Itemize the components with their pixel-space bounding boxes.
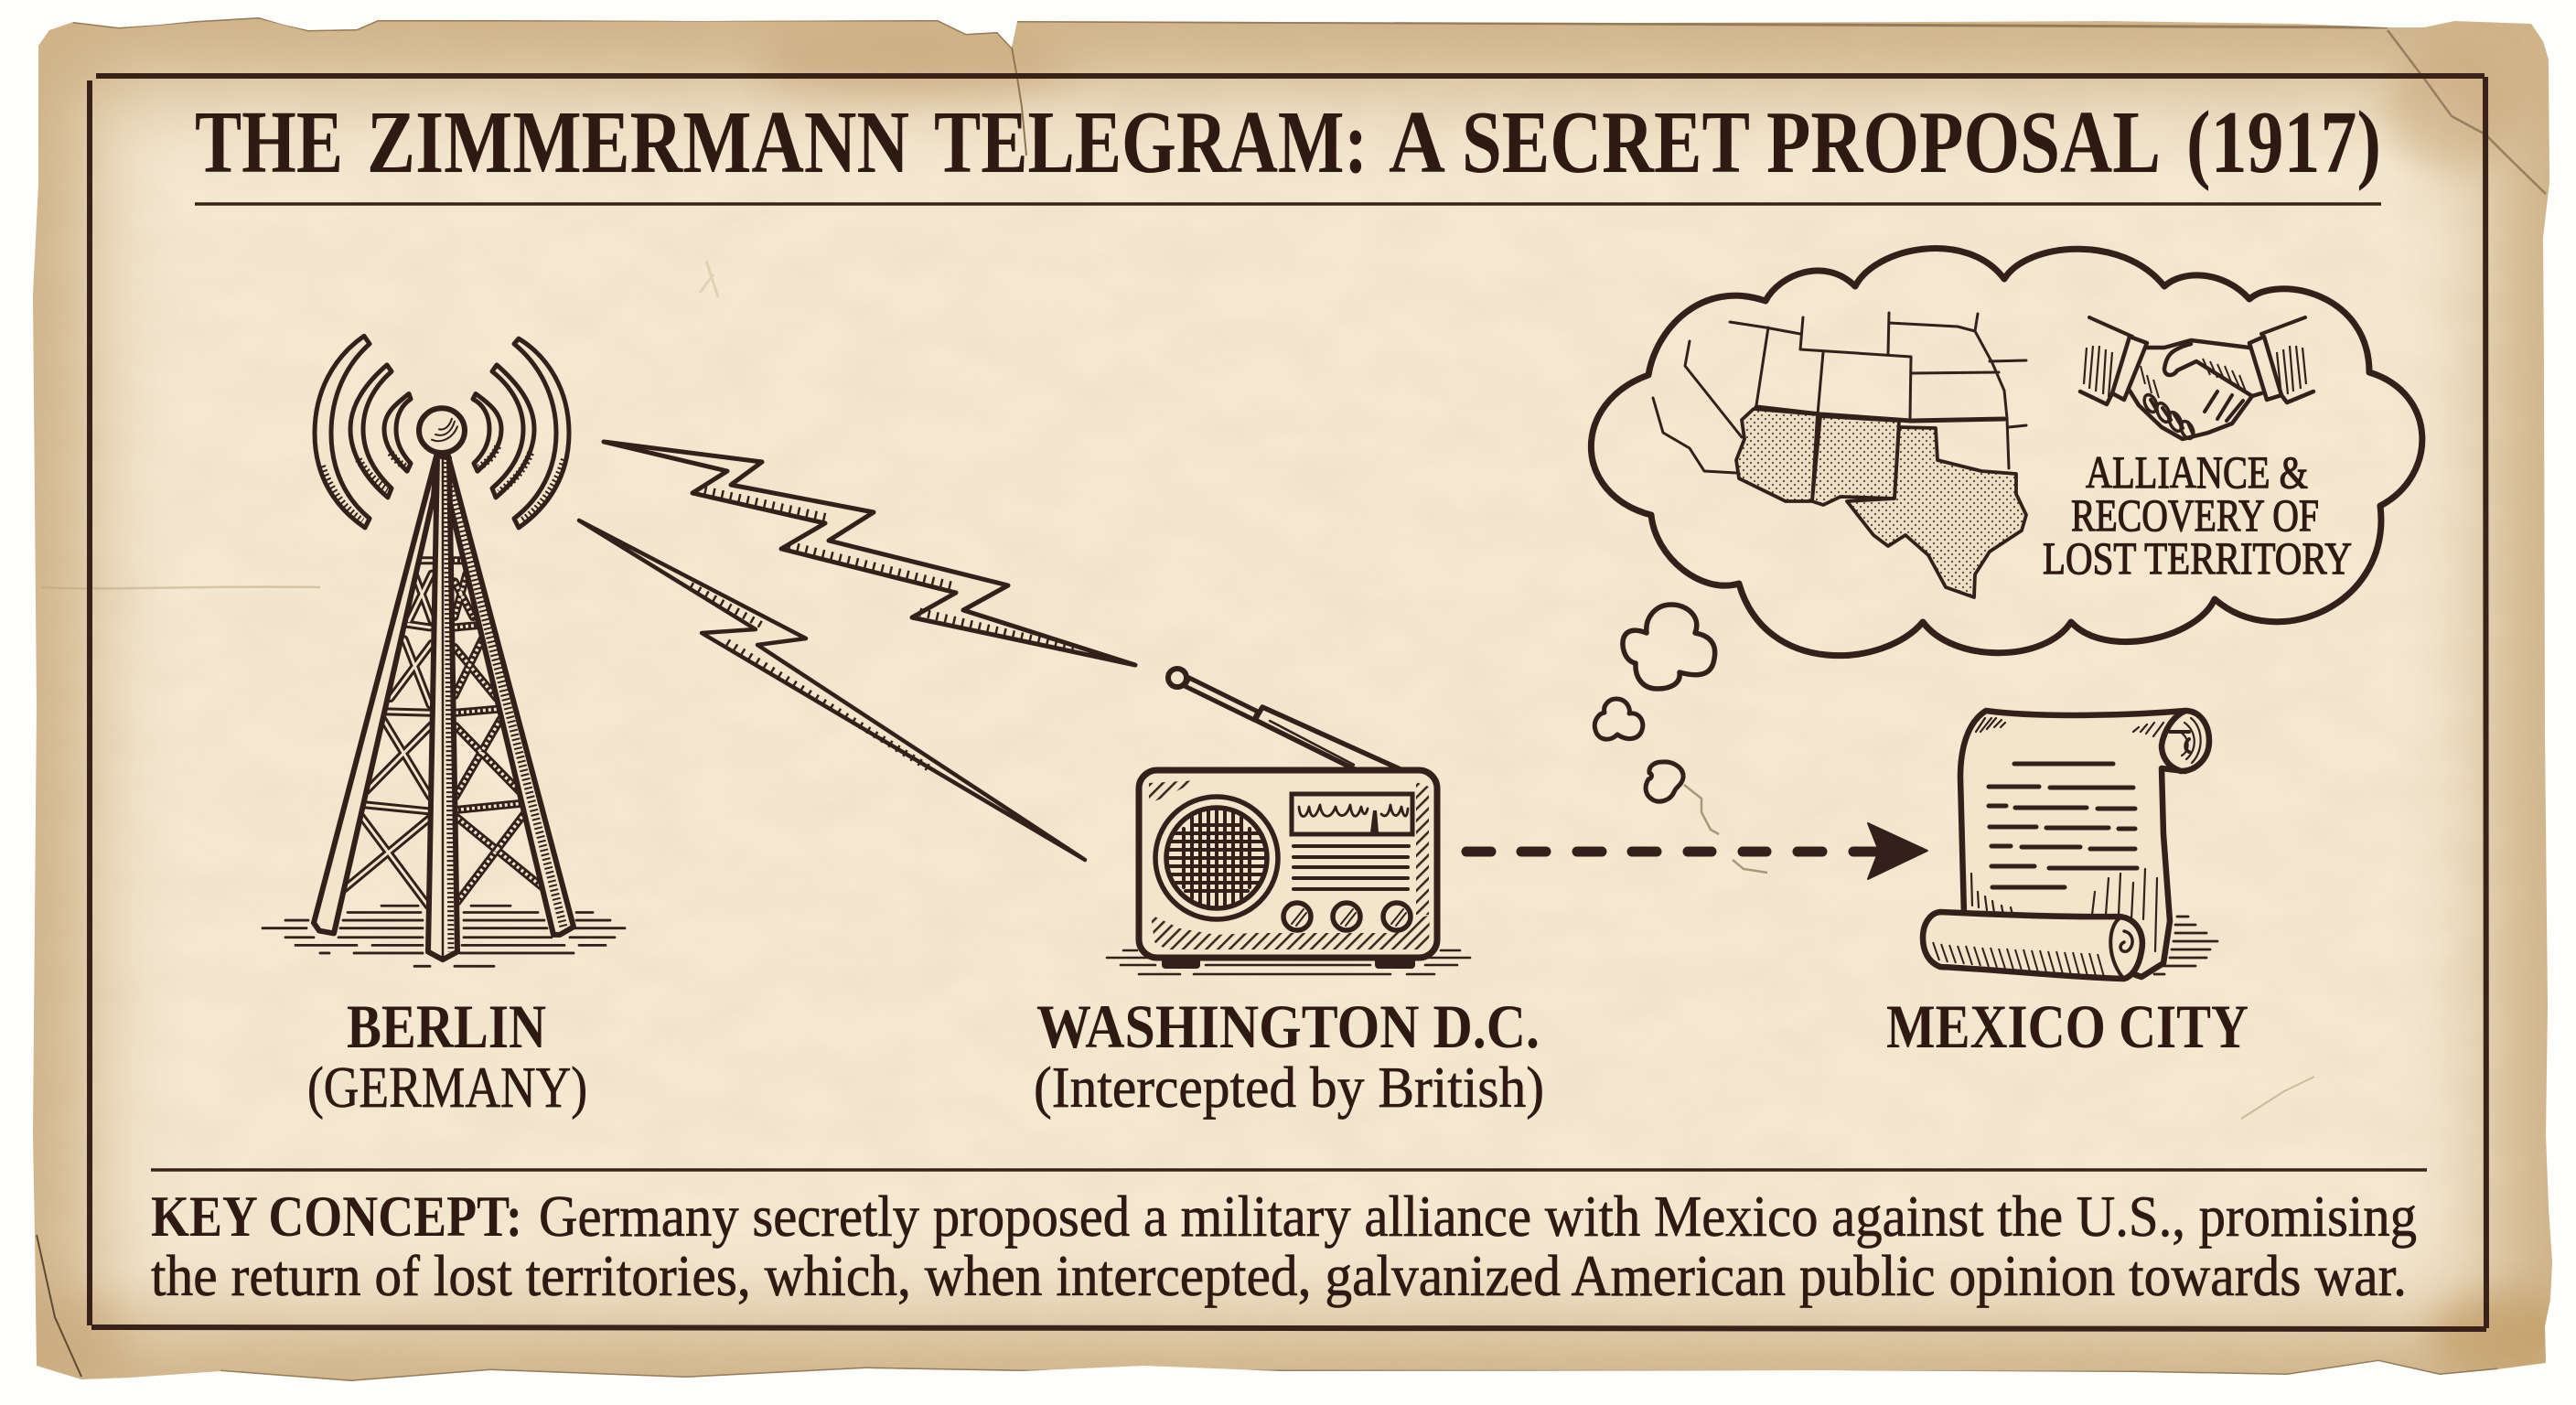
location label: Washington D.C.: WASHINGTON D.C. [1036, 992, 1540, 1061]
New Mexico [1812, 416, 1899, 505]
radio antenna [1168, 669, 1402, 770]
icon: radio tower (Berlin) [263, 336, 625, 966]
location label: Washington D.C.: (Intercepted by British) [1034, 1056, 1544, 1120]
icon: thought bubble with map and handshake [1591, 249, 2422, 801]
thought trail bubbles [1594, 605, 1715, 801]
thought cloud caption: ALLIANCE & [2086, 446, 2308, 498]
key concept text: Germany secretly proposed a military alliance with Mexico against the U.S., promising [539, 1184, 2417, 1249]
title [195, 93, 2381, 191]
location label: Berlin: (GERMANY) [307, 1056, 587, 1120]
title: A [1389, 93, 1445, 191]
Arizona [1736, 409, 1818, 501]
thought cloud caption: RECOVERY OF [2071, 489, 2319, 541]
neighbouring state lines [1653, 313, 2026, 473]
thought cloud caption [2043, 446, 2352, 584]
speaker grille [1155, 797, 1278, 919]
left lattice braces [343, 561, 432, 906]
tuning dial [1292, 794, 1412, 834]
ground hatching [263, 906, 625, 966]
icon: rolled scroll (Mexico City) [1923, 711, 2217, 979]
main thought cloud outline [1591, 249, 2422, 656]
title: SECRET [1462, 93, 1750, 191]
territorial border line [1756, 407, 2004, 421]
radio ground lines [1107, 950, 1470, 974]
arrow: lower lightning bolt [579, 520, 1085, 860]
key concept text [151, 1184, 2417, 1308]
key concept text: KEY CONCEPT: [151, 1184, 522, 1249]
speaker slots [1293, 846, 1409, 889]
title: PROPOSAL [1766, 93, 2161, 191]
title underline [195, 202, 2381, 206]
arrow: upper lightning bolt [604, 442, 1135, 665]
right leg [447, 453, 574, 935]
title: THE [195, 93, 343, 191]
radio knobs [1283, 903, 1411, 930]
key concept divider [151, 1168, 2427, 1172]
title: (1917) [2186, 93, 2381, 191]
arrow: dashed line from Washington to Mexico City [1466, 823, 1927, 879]
radio body [1139, 770, 1437, 958]
scroll text lines [1989, 764, 2137, 887]
map of the southwestern United States [1653, 313, 2026, 597]
key concept text: the return of lost territories, which, when intercepted, galvanized American public opinion towards war. [151, 1243, 2407, 1308]
right lattice braces [455, 561, 544, 902]
lower roll [1923, 912, 2142, 979]
scroll ground hatching [2154, 917, 2217, 974]
icon: handshake [2080, 317, 2313, 441]
location label: Berlin: BERLIN [347, 992, 546, 1061]
radio feet [1162, 955, 1415, 969]
title: TELEGRAM: [934, 93, 1368, 191]
icon: radio (Washington D.C.) [1107, 669, 1470, 974]
signal arcs [315, 336, 569, 528]
location label: Mexico City: MEXICO CITY [1886, 992, 2249, 1061]
antenna ball [419, 408, 465, 453]
centre mast [428, 456, 457, 960]
scroll sheet [1960, 711, 2185, 977]
location label: Berlin [307, 992, 587, 1120]
Texas [1847, 427, 2026, 597]
thought cloud caption: LOST TERRITORY [2043, 532, 2352, 584]
upper roll [2162, 711, 2209, 771]
title: ZIMMERMANN [367, 93, 909, 191]
location label: Washington D.C. [1034, 992, 1544, 1120]
radio hatching [1149, 780, 1430, 949]
scroll shading strokes [1971, 718, 2170, 951]
left leg [314, 453, 437, 933]
